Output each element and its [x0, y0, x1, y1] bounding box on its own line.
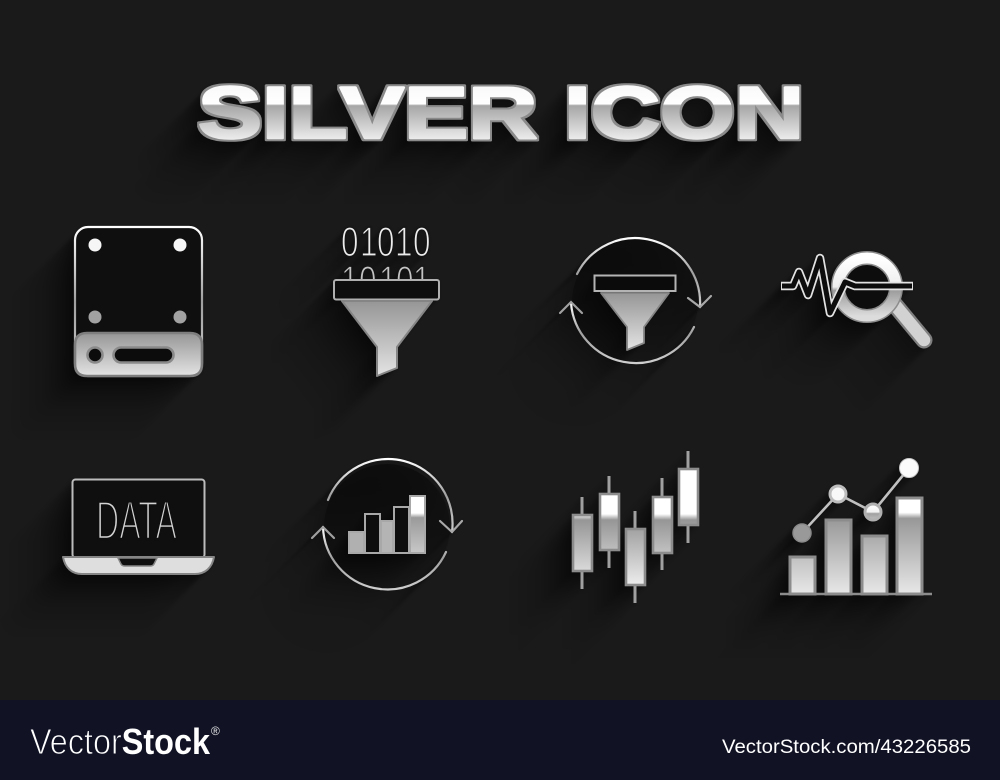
icon: binary data funnel: [334, 218, 439, 376]
icon: laptop with data: [63, 480, 214, 574]
binary digits top row: 01010: [341, 218, 431, 265]
funnel lip: [334, 280, 439, 300]
footer image id: VectorStock.com/43226585: [722, 737, 971, 758]
registered mark: ®: [211, 724, 220, 738]
icon: hard disk drive: [75, 227, 202, 376]
laptop base: [63, 557, 214, 574]
funnel body: [342, 301, 432, 376]
bars: [790, 498, 922, 594]
filter body: [601, 293, 669, 350]
footer bar: [0, 700, 1000, 780]
binary digits entering funnel: 10101: [341, 257, 431, 304]
magnifier lens: [838, 258, 896, 316]
trend line: [802, 468, 909, 533]
rising bars: [349, 496, 425, 553]
icon: candlestick chart: [573, 451, 698, 603]
cycle arrows: [312, 459, 462, 589]
laptop notch: [118, 558, 157, 566]
baseline: [780, 593, 932, 595]
title: SILVER ICON: [198, 73, 804, 154]
icon: bar chart with cycle arrows: [312, 459, 462, 590]
candle wicks: [582, 451, 688, 603]
magnifier handle: [895, 305, 924, 340]
icon: bars with trend line: [780, 458, 932, 594]
filter lip: [594, 276, 676, 291]
laptop screen: [72, 480, 204, 558]
cycle interior shade: [324, 464, 450, 590]
icon: magnifier over waveform: [781, 258, 924, 340]
trend points: [793, 458, 918, 542]
candle bodies: [573, 469, 698, 585]
footer logo: VectorStock: [30, 721, 211, 762]
cycle arrows: [560, 238, 711, 363]
data label: DATA: [96, 489, 177, 551]
waveform line: [781, 258, 913, 313]
disk casing: [75, 227, 202, 376]
disk screws: [88, 238, 186, 324]
icon: filter with cycle arrows: [560, 238, 711, 365]
cycle interior shade: [572, 239, 698, 365]
disk front panel: [75, 333, 202, 376]
